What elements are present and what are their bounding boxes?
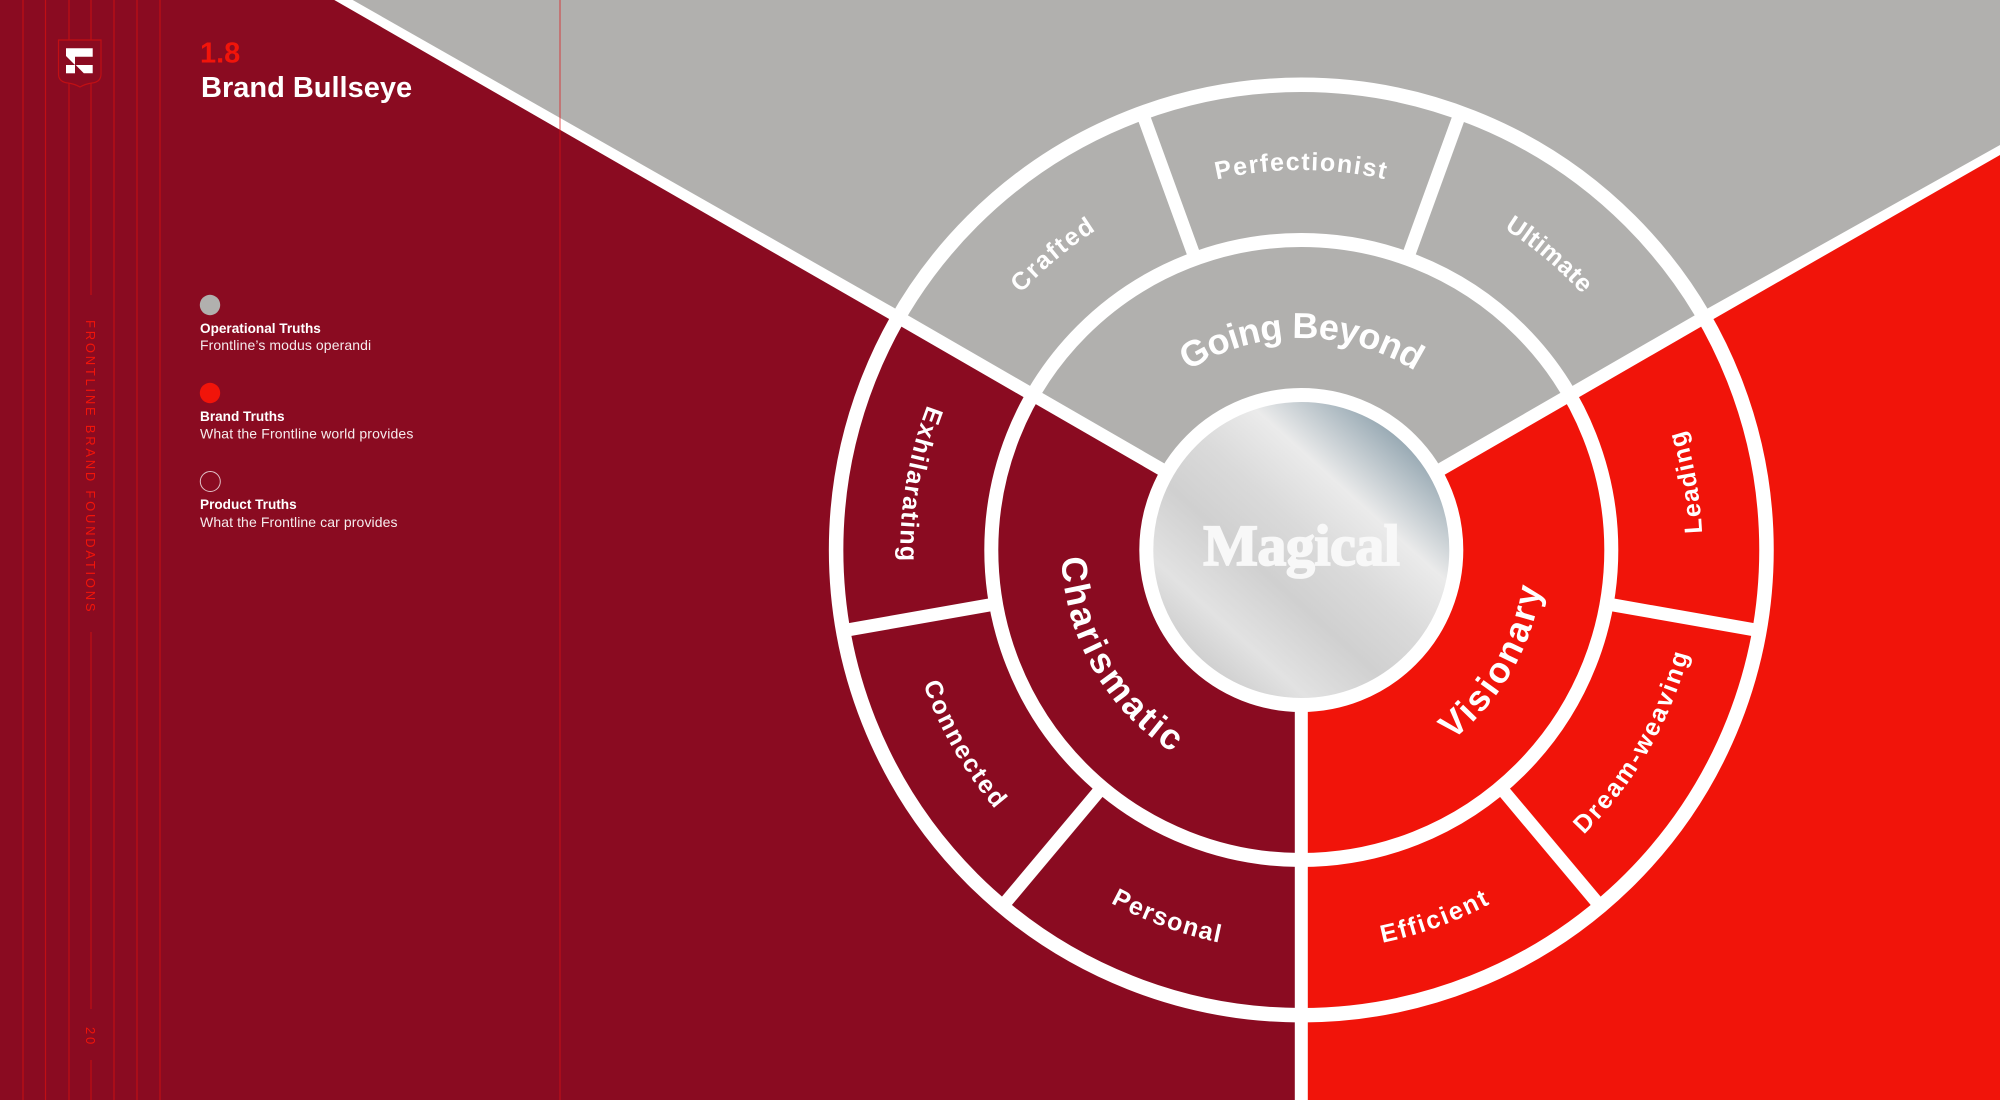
label: Exhilarating: Exhilarating — [895, 406, 943, 560]
vertical running title: FRONTLINE BRAND FOUNDATIONS — [83, 320, 98, 614]
sector dividers — [843, 113, 1759, 1100]
panel: operational truths grey background — [344, 0, 2000, 550]
logo shield — [58, 40, 101, 87]
title: Brand Bullseye — [201, 72, 412, 104]
right divider tapering off the wheel — [1704, 145, 2000, 324]
label: Going Beyond: Going Beyond — [1181, 313, 1426, 370]
bullseye chart — [828, 78, 1774, 1100]
legend: brand truths: What the Frontline world provides — [200, 426, 414, 442]
page number: 20 — [83, 1027, 98, 1047]
label: Charismatic: Charismatic — [1062, 558, 1180, 750]
label: Efficient: Efficient — [1380, 890, 1490, 942]
vertical margin guide lines — [23, 0, 560, 1100]
label: Visionary: Visionary — [1436, 584, 1546, 734]
legend: operational truths: Frontline’s modus operandi — [200, 337, 371, 353]
legend: operational truths: Operational Truths — [200, 321, 321, 336]
label: Personal: Personal — [1112, 888, 1222, 942]
outer ring — [836, 85, 1766, 1015]
centre circle: Magical: Magical — [1203, 513, 1400, 578]
label: Ultimate: Ultimate — [1508, 215, 1590, 292]
section number: 1.8 — [200, 38, 240, 70]
legend: product truths: What the Frontline car provides — [200, 514, 398, 530]
label: Connected: Connected — [926, 680, 1008, 808]
label: Crafted: Crafted — [1012, 216, 1094, 290]
centre circle: Magical — [1146, 395, 1456, 705]
label: Dream-weaving: Dream-weaving — [1572, 652, 1692, 834]
legend: product truths — [200, 472, 398, 530]
legend: brand truths: Brand Truths — [200, 409, 285, 424]
label: Leading: Leading — [1672, 432, 1702, 532]
panel: brand truths red background — [1301, 150, 2000, 1100]
legend: brand truths — [200, 383, 414, 442]
middle ring — [991, 240, 1611, 860]
legend: operational truths — [200, 295, 371, 353]
label: Perfectionist: Perfectionist — [1214, 152, 1387, 180]
left divider tapering off the wheel — [334, 0, 899, 324]
legend: product truths: Product Truths — [200, 497, 297, 512]
